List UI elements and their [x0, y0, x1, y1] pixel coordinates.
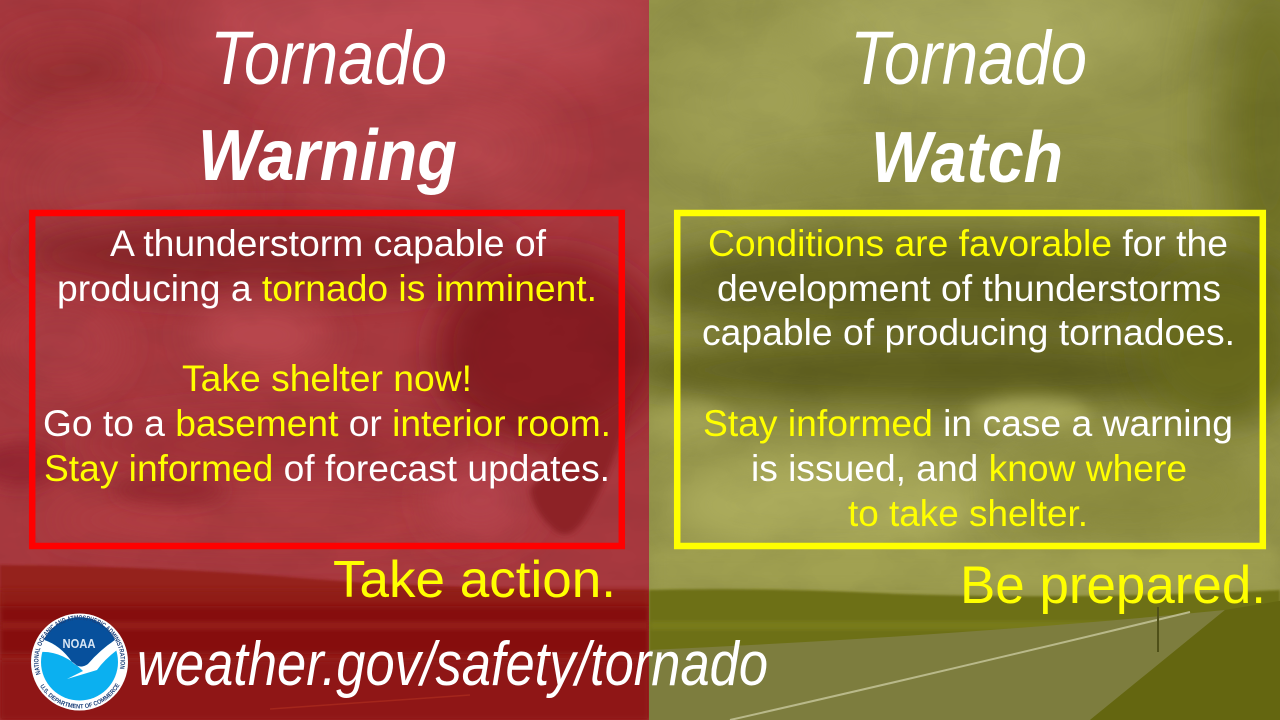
heading: Tornado Warning: Warning: [198, 116, 457, 196]
panel: warning text box: Go to a basement or interior room.: [43, 402, 611, 444]
callout: Be prepared: Be prepared.: [960, 556, 1266, 615]
panel: warning text box: Stay informed of forecast updates.: [44, 447, 610, 489]
heading: Tornado Warning: Tornado: [210, 16, 447, 101]
heading: Tornado Watch: Tornado: [850, 16, 1087, 101]
panel: watch text box: is issued, and know where: [751, 447, 1187, 489]
road: [649, 610, 1225, 720]
link: weather.gov/safety/tornado: weather.gov/safety/tornado: [137, 630, 768, 699]
icon: NOAA logo: NATIONAL OCEANIC AND ATMOSPHERIC ADMINISTRATION: [34, 615, 126, 676]
panel: watch text box: Conditions are favorable for the: [708, 222, 1228, 264]
panel: watch text box: capable of producing tornadoes.: [702, 311, 1235, 353]
heading: Tornado Watch: [850, 16, 1087, 198]
ground: [0, 565, 649, 720]
panel: warning text box: [32, 213, 622, 546]
tornado funnel: [529, 418, 618, 536]
callout: Take action: Take action.: [333, 551, 616, 609]
icon: NOAA logo: NOAA: [62, 636, 96, 651]
panel: watch text box: Stay informed in case a warning: [703, 402, 1233, 444]
panel: warning text box: A thunderstorm capable of: [110, 222, 547, 264]
heading: Tornado Warning: [198, 16, 457, 196]
panel: watch text box: to take shelter.: [848, 492, 1088, 534]
panel: warning text box: Take shelter now!: [182, 357, 472, 399]
icon: NOAA logo: U.S. DEPARTMENT OF COMMERCE: [40, 683, 120, 708]
icon: NOAA logo: [31, 614, 128, 710]
panel: watch text box: [677, 213, 1263, 546]
panel: watch background (olive storm photo): [610, 0, 1280, 720]
heading: Tornado Watch: Watch: [871, 118, 1063, 198]
panel: warning text box: producing a tornado is imminent.: [57, 267, 597, 309]
panel: watch text box: development of thunderstorms: [717, 267, 1221, 309]
ground: [649, 589, 1280, 720]
panel: warning background (red storm photo): [0, 0, 665, 720]
